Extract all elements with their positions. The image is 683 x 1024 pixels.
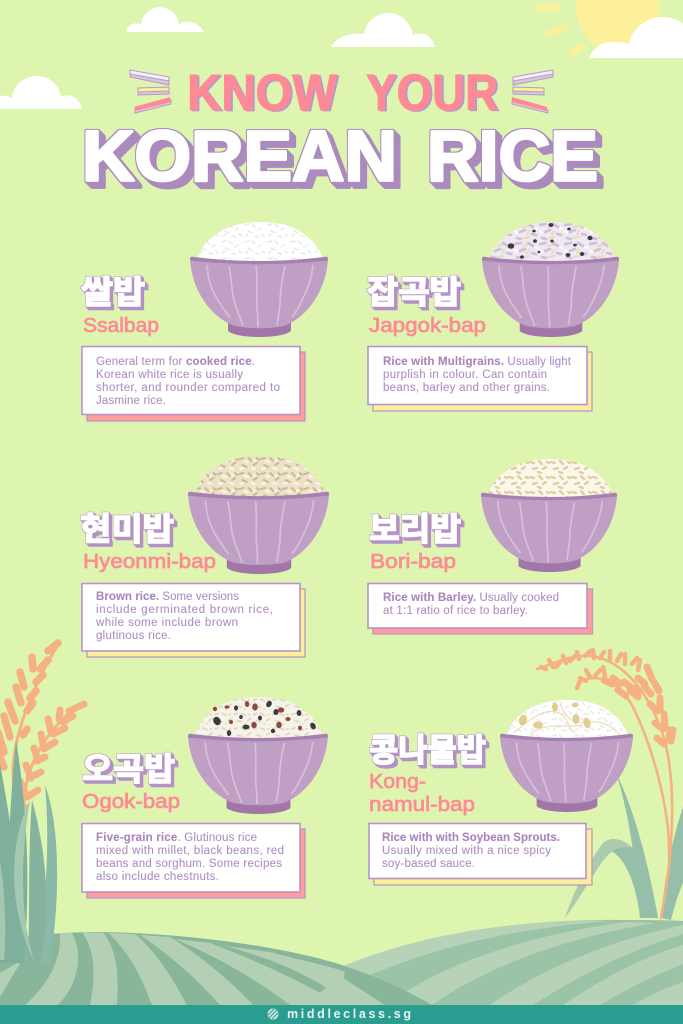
title: know your: KNOW bbox=[187, 64, 338, 121]
hills: right bbox=[340, 920, 683, 1005]
rice bowl: brown rice bbox=[188, 456, 329, 574]
panel: japgok-bap bbox=[367, 222, 619, 411]
panel: ogok-bap bbox=[82, 697, 328, 898]
description box: Rice with with Soybean Sprouts. bbox=[382, 832, 560, 844]
description box: Jasmine rice. bbox=[96, 395, 166, 407]
cloud 4 bbox=[589, 17, 683, 58]
rice bowl: multigrain bbox=[482, 222, 619, 337]
rice bowl: soybean sprouts bbox=[500, 700, 633, 812]
heading: romanised: Hyeonmi-bap bbox=[83, 550, 216, 573]
description box: while some include brown bbox=[95, 617, 238, 629]
footer text: middleclass.sg bbox=[287, 1007, 411, 1021]
description box: Rice with Multigrains. Usually light bbox=[383, 356, 572, 368]
rice bowl: white rice bbox=[190, 222, 328, 337]
title: korean rice: KOREAN bbox=[82, 118, 397, 196]
panel: bori-bap bbox=[368, 459, 617, 634]
description box: shorter, and rounder compared to bbox=[96, 382, 280, 394]
cloud 3 bbox=[0, 76, 82, 109]
heading: romanised: Japgok-bap bbox=[369, 314, 486, 337]
cloud 1 bbox=[126, 7, 204, 32]
title: know your: YOUR bbox=[366, 64, 498, 121]
description box: beans and sorghum. Some recipes bbox=[96, 858, 282, 870]
description box: glutinous rice. bbox=[96, 630, 171, 642]
description box: soy-based sauce. bbox=[382, 858, 475, 870]
rice bowl: five grain bbox=[188, 697, 328, 814]
sun bbox=[538, 0, 660, 57]
panel: hyeonmi-bap bbox=[80, 456, 329, 657]
description box: beans, barley and other grains. bbox=[383, 382, 550, 394]
heading: korean: 쌀밥 bbox=[81, 274, 145, 310]
cloud 2 bbox=[331, 13, 435, 47]
rice bowl: barley bbox=[481, 459, 617, 572]
description box bbox=[369, 824, 592, 885]
heading: korean: 콩나물밥 bbox=[369, 732, 486, 768]
footer bar bbox=[0, 1005, 683, 1024]
description box: Five-grain rice. Glutinous rice bbox=[96, 832, 257, 844]
heading: romanised bbox=[369, 770, 475, 816]
left rice plant bbox=[0, 643, 84, 963]
description box: Korean white rice is usually bbox=[96, 369, 243, 381]
description box bbox=[368, 346, 592, 411]
heading: romanised: Ogok-bap bbox=[82, 790, 180, 813]
right rice plant bbox=[537, 650, 683, 920]
title: know your bbox=[187, 64, 498, 121]
title decoration: left bars bbox=[130, 70, 171, 113]
hills: left bbox=[0, 932, 432, 1005]
heading: romanised: namul-bap bbox=[369, 793, 475, 816]
heading: korean: 현미밥 bbox=[80, 511, 174, 547]
title: korean rice bbox=[82, 118, 598, 196]
panel: ssalbap bbox=[81, 222, 328, 421]
heading: romanised: Bori-bap bbox=[370, 550, 456, 573]
description box: mixed with millet, black beans, red bbox=[96, 845, 284, 857]
heading: korean: 보리밥 bbox=[369, 511, 461, 547]
panel: kong-namul-bap bbox=[369, 700, 633, 885]
description box: purplish in colour. Can contain bbox=[383, 369, 547, 381]
heading: korean: 잡곡밥 bbox=[367, 274, 461, 310]
description box: Rice with Barley. Usually cooked bbox=[383, 592, 559, 604]
footer logo icon bbox=[268, 1008, 278, 1020]
description box bbox=[82, 346, 305, 421]
title decoration: right bars bbox=[512, 70, 553, 113]
description box: Brown rice. Some versions bbox=[96, 591, 239, 603]
description box bbox=[82, 584, 305, 657]
description box: Usually mixed with a nice spicy bbox=[382, 845, 551, 857]
description box: at 1:1 ratio of rice to barley. bbox=[383, 605, 528, 617]
title: korean rice: RICE bbox=[427, 118, 598, 196]
description box: General term for cooked rice. bbox=[96, 356, 255, 368]
heading: romanised: Kong- bbox=[369, 770, 426, 793]
heading: korean: 오곡밥 bbox=[82, 751, 175, 787]
description box bbox=[82, 824, 305, 898]
description box: also include chestnuts. bbox=[96, 871, 219, 883]
description box: include germinated brown rice, bbox=[96, 604, 273, 616]
description box bbox=[368, 584, 592, 634]
heading: romanised: Ssalbap bbox=[83, 314, 159, 337]
